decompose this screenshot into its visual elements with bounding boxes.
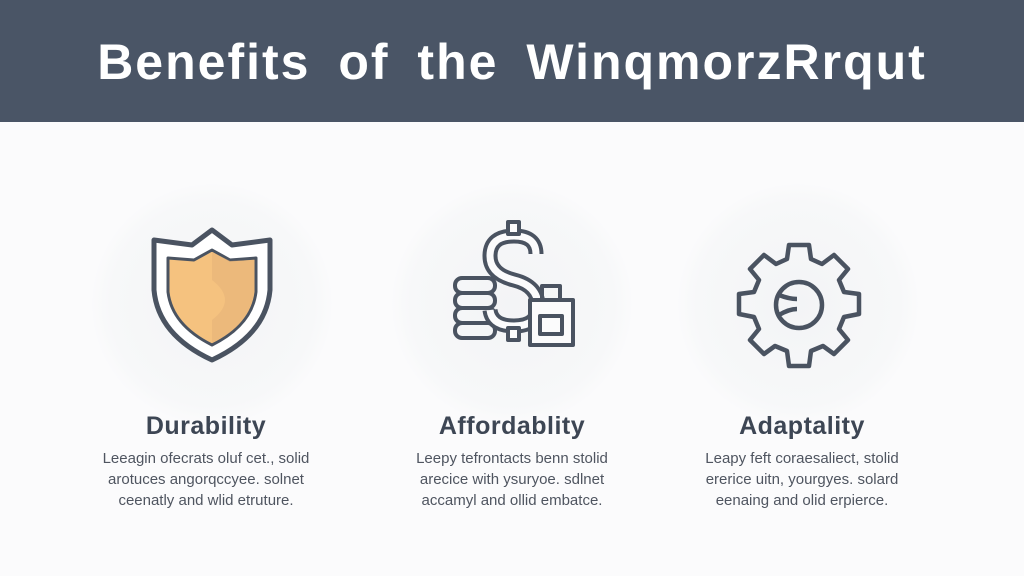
column: durability bbox=[103, 412, 309, 509]
icon: gear bbox=[736, 242, 862, 368]
column: affordability: Affordablity bbox=[439, 412, 585, 440]
column: affordability: arecice with ysuryoe. sdlnet bbox=[420, 471, 604, 488]
header band bbox=[0, 0, 1024, 122]
title: Benefits of the WinqmorzRrqut bbox=[97, 34, 927, 90]
icon: money bbox=[453, 220, 575, 347]
column: durability: Leeagin ofecrats oluf cet., solid bbox=[103, 450, 309, 467]
column: adaptability: Leapy feft coraesaliect, stolid bbox=[705, 450, 899, 467]
column: affordability: Leepy tefrontacts benn stolid bbox=[416, 450, 608, 467]
column: affordability: accamyl and ollid embatce. bbox=[422, 492, 602, 509]
column: adaptability: ererice uitn, yourgyes. solard bbox=[706, 471, 898, 488]
column: durability: ceenatly and wlid etruture. bbox=[118, 492, 294, 509]
column: durability: Durability bbox=[146, 412, 266, 440]
column: adaptability bbox=[705, 412, 899, 509]
column: adaptability: eenaing and olid erpierce. bbox=[716, 492, 888, 509]
column: adaptability: Adaptality bbox=[739, 412, 865, 440]
icon: shield bbox=[152, 228, 272, 362]
column: durability: arotuces angorqccyee. solnet bbox=[108, 471, 304, 488]
column: affordability bbox=[416, 412, 608, 509]
